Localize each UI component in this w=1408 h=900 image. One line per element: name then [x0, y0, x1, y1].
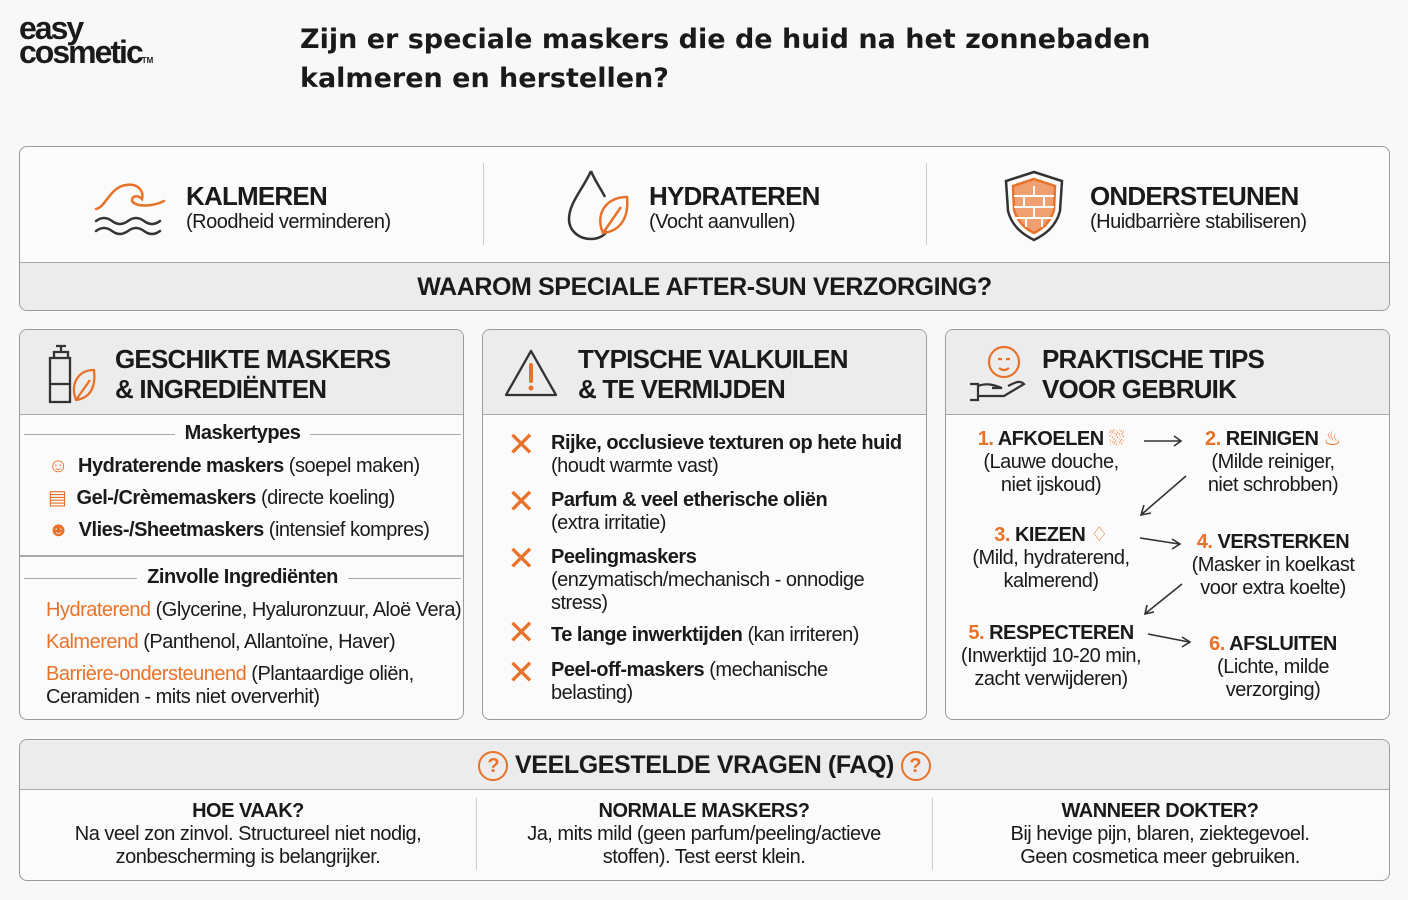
steps: (Lauwe douche,	[983, 451, 1119, 473]
faq 3: Geen cosmetica meer gebruiken.	[1020, 846, 1300, 868]
maskertypes	[24, 422, 461, 541]
faq 2: stoffen). Test eerst klein.	[603, 846, 805, 868]
faq 2: Ja, mits mild (geen parfum/peeling/actieve	[527, 823, 881, 845]
maskertypes: ▤ Gel-/Crèmemaskers (directe koeling)	[48, 487, 395, 509]
steps: zacht verwijderen)	[974, 668, 1128, 690]
list: (extra irritatie)	[551, 512, 666, 534]
item: kalmeren: (Roodheid verminderen)	[186, 211, 391, 233]
panel: FAQ: ?	[909, 755, 922, 777]
ingredienten: Hydraterend (Glycerine, Hyaluronzuur, Aloë Vera)	[46, 599, 461, 621]
faq 3: WANNEER DOKTER?	[1062, 800, 1258, 822]
panel: praktische tips	[945, 329, 1390, 720]
list: Peel-off-maskers (mechanische	[551, 659, 828, 681]
header: GESCHIKTE MASKERS	[115, 344, 390, 374]
title	[300, 24, 1151, 94]
steps: 3. KIEZEN ♢	[994, 524, 1108, 546]
icon: bottle leaf	[48, 344, 96, 404]
list: ✕	[507, 613, 535, 653]
faq 1: Na veel zon zinvol. Structureel niet nodig,	[75, 823, 421, 845]
item: hydrateren	[568, 170, 820, 240]
list: ✕	[507, 482, 535, 522]
item: ondersteunen	[1004, 170, 1307, 242]
heading band: WAAROM SPECIALE AFTER-SUN VERZORGING?	[417, 273, 992, 301]
panel: geschikte maskers	[19, 329, 464, 720]
icon: wave	[94, 183, 166, 236]
list: (enzymatisch/mechanisch - onnodige	[551, 569, 864, 591]
item: kalmeren: KALMEREN	[186, 181, 327, 211]
item: ondersteunen: (Huidbarrière stabiliseren)	[1090, 211, 1307, 233]
faq 2	[527, 800, 881, 868]
ingredienten: Ceramiden - mits niet oververhit)	[46, 686, 320, 708]
logo: cosmeticTM	[19, 34, 153, 70]
list: (houdt warmte vast)	[551, 455, 718, 477]
list: Peelingmaskers	[551, 546, 696, 568]
panel: valkuilen	[482, 329, 927, 720]
heading band	[20, 262, 1389, 312]
list: Rijke, occlusieve texturen op hete huid	[551, 432, 902, 454]
steps: verzorging)	[1226, 679, 1320, 701]
header	[20, 330, 463, 415]
steps: niet schrobben)	[1208, 474, 1338, 496]
steps: (Masker in koelkast	[1192, 554, 1354, 576]
panel: praktische tips: VOOR GEBRUIK	[1042, 374, 1236, 404]
logo	[19, 10, 153, 70]
ingredienten: Kalmerend (Panthenol, Allantoïne, Haver)	[46, 631, 395, 653]
steps: kalmerend)	[1003, 570, 1099, 592]
list: ✕	[507, 653, 535, 693]
list: belasting)	[551, 682, 633, 704]
list: Te lange inwerktijden (kan irriteren)	[551, 624, 859, 646]
steps: (Inwerktijd 10-20 min,	[961, 645, 1141, 667]
panel: FAQ: VEELGESTELDE VRAGEN (FAQ)	[515, 751, 894, 779]
panel: valkuilen: TYPISCHE VALKUILEN	[578, 344, 848, 374]
steps: voor extra koelte)	[1200, 577, 1346, 599]
panel: valkuilen: & TE VERMIJDEN	[578, 374, 785, 404]
icon: warning	[504, 350, 558, 396]
item: hydrateren: HYDRATEREN	[649, 181, 820, 211]
steps: 5. RESPECTEREN	[968, 622, 1134, 644]
faq 3: Bij hevige pijn, blaren, ziektegevoel.	[1011, 823, 1309, 845]
maskertypes: Maskertypes	[185, 422, 300, 444]
icon: face hand	[970, 346, 1026, 402]
faq 2: NORMALE MASKERS?	[599, 800, 809, 822]
list: ✕	[507, 539, 535, 579]
panel: FAQ: ?	[487, 755, 500, 777]
list	[507, 425, 902, 704]
faq 1: HOE VAAK?	[192, 800, 304, 822]
list: Parfum & veel etherische oliën	[551, 489, 827, 511]
title: kalmeren en herstellen?	[300, 63, 669, 94]
steps: (Mild, hydraterend,	[972, 547, 1130, 569]
title: Zijn er speciale maskers die de huid na het zonnebaden	[300, 24, 1151, 55]
item: hydrateren: (Vocht aanvullen)	[649, 211, 795, 233]
steps: (Milde reiniger,	[1211, 451, 1335, 473]
steps: 1. AFKOELEN ⛆	[978, 428, 1124, 450]
item: kalmeren	[94, 181, 391, 236]
steps: niet ijskoud)	[1001, 474, 1101, 496]
icon: drop leaf	[568, 170, 629, 240]
ingredienten: Barrière-ondersteunend (Plantaardige oliën,	[46, 663, 414, 685]
list: ✕	[507, 425, 535, 465]
icon: shield brick	[1004, 170, 1064, 242]
maskertypes: ☻ Vlies-/Sheetmaskers (intensief kompres)	[48, 519, 429, 541]
panel: FAQ	[19, 739, 1390, 881]
item: ondersteunen: ONDERSTEUNEN	[1090, 181, 1299, 211]
ingredienten: Zinvolle Ingrediënten	[147, 566, 338, 588]
list: stress)	[551, 592, 608, 614]
panel: why after-sun	[19, 146, 1390, 311]
faq 1: zonbescherming is belangrijker.	[116, 846, 380, 868]
steps	[961, 428, 1355, 701]
arrows	[1140, 435, 1192, 648]
faq 1	[75, 800, 421, 868]
maskertypes: ☺ Hydraterende maskers (soepel maken)	[48, 455, 420, 477]
header: & INGREDIËNTEN	[115, 374, 326, 404]
steps: 4. VERSTERKEN	[1197, 531, 1349, 553]
logo: easy	[19, 10, 82, 46]
steps: 2. REINIGEN ♨	[1205, 428, 1341, 450]
ingredienten	[24, 566, 461, 708]
panel: praktische tips: PRAKTISCHE TIPS	[1042, 344, 1264, 374]
steps: (Lichte, milde	[1217, 656, 1329, 678]
faq 3	[1011, 800, 1309, 868]
steps: 6. AFSLUITEN	[1209, 633, 1337, 655]
